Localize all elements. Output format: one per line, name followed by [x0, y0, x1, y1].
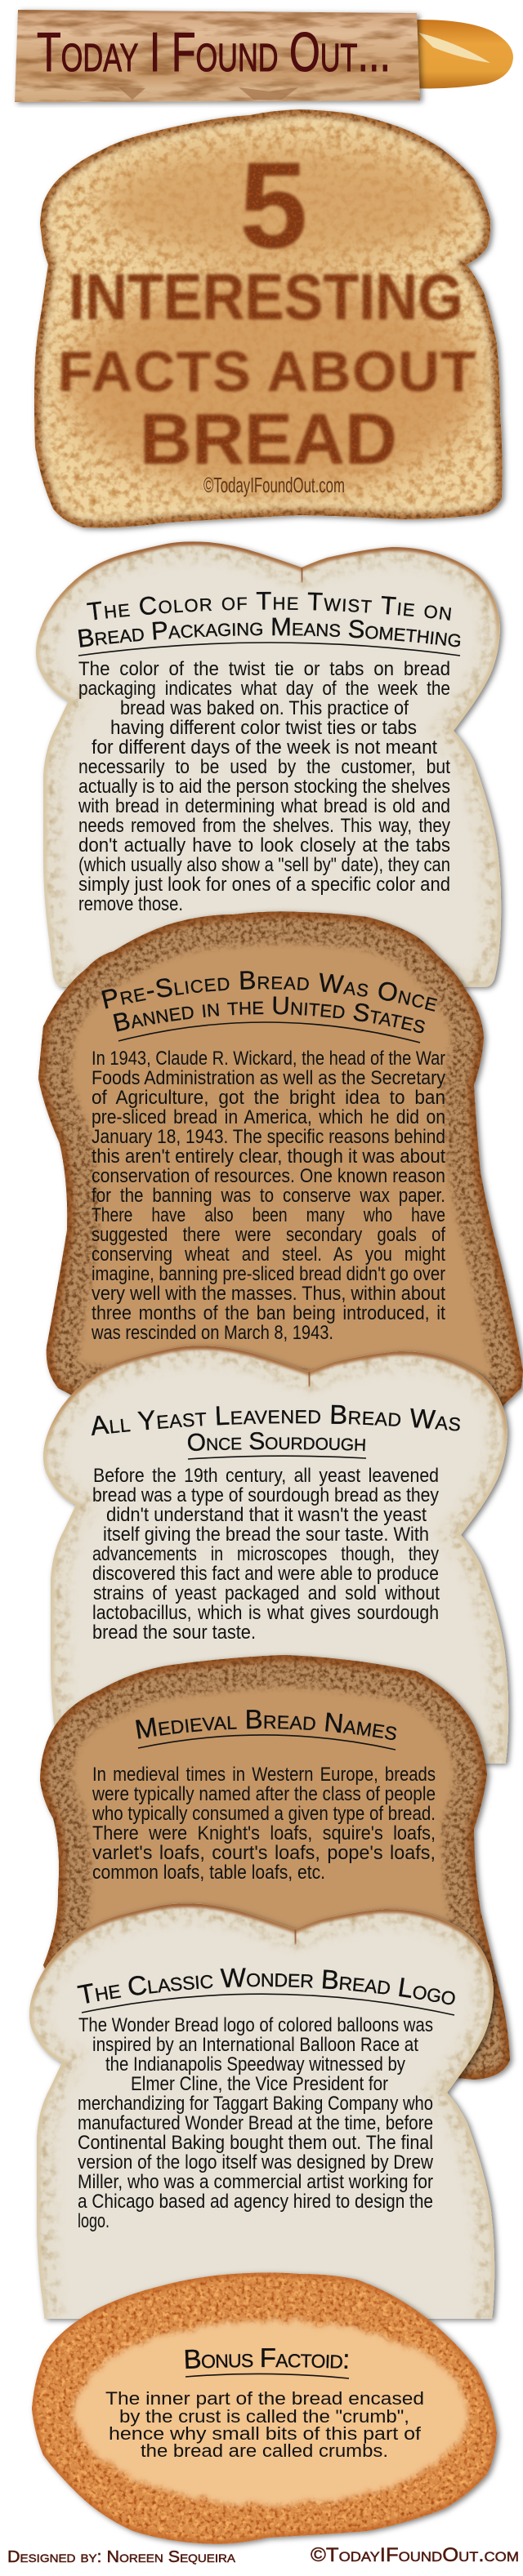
body text: was rescinded on March 8, 1943.: [91, 1322, 333, 1344]
panel: pre-sliced bread ban: Banned in the United States: [113, 996, 425, 1034]
body text: The inner part of the bread encased: [105, 2388, 424, 2409]
body text: packaging indicates what day of the week the: [78, 678, 450, 700]
toast bread: [34, 109, 503, 527]
body text: [92, 1465, 440, 1644]
body text: didn't understand that it wasn't the yeast: [106, 1504, 427, 1526]
body text: three months of the ban being introduced, it: [92, 1302, 445, 1324]
toast title text: [58, 136, 476, 479]
body text: [92, 1764, 436, 1884]
body text: The color of the twist tie or tabs on bread: [78, 658, 450, 680]
body text: actually is to aid the person stocking the shelves: [78, 776, 450, 798]
body text: inspired by an International Balloon Race at: [92, 2034, 418, 2056]
body text: conserving wheat and steel. As you might: [92, 1244, 445, 1266]
round bread slice: [32, 2273, 497, 2544]
panel: medieval bread names: [38, 1653, 516, 2085]
body text: lactobacillus, which is what gives sourdough: [92, 1602, 439, 1624]
body text: Elmer Cline, the Vice President for: [131, 2073, 388, 2095]
body text: logo.: [78, 2210, 110, 2232]
panel: pre-sliced bread ban: [38, 910, 523, 1412]
toast credit: ©TodayIFoundOut.com: [203, 473, 345, 497]
body text: [91, 1048, 445, 1344]
header title: Today I Found Out...: [37, 21, 391, 83]
body text: varlet's loafs, court's loafs, pope's loafs,: [92, 1842, 436, 1864]
body text: suggested there were secondary goals of: [92, 1224, 445, 1246]
heading: All Yeast Leavened Bread Was: [92, 1404, 461, 1435]
toast title text: INTERESTING: [69, 260, 463, 333]
panel: twist tie colour: [34, 539, 507, 993]
icon: baguette: [413, 20, 513, 88]
body text: pre-sliced bread in America, which he did on: [92, 1106, 445, 1128]
panel: yeast leavened bread: [42, 1344, 515, 1769]
body text: merchandizing for Taggart Baking Company who: [78, 2093, 433, 2115]
body text: [78, 658, 450, 915]
body text: with bread in determining what bread is old and: [78, 795, 450, 817]
body text: necessarily to be used by the customer, but: [78, 756, 450, 778]
body text: were typically named after the class of people: [92, 1783, 436, 1805]
panel: twist tie colour: Bread Packaging Means Something: [78, 617, 461, 647]
wheat bread slice: [38, 911, 523, 1408]
body text: for the banning was to conserve wax paper.: [92, 1185, 445, 1207]
body text: In medieval times in Western Europe, breads: [92, 1764, 436, 1786]
body text: conservation of resources. One known reason: [92, 1165, 445, 1187]
heading: Pre-Sliced Bread Was Once: [101, 971, 438, 1012]
header: paper bag with baguette: [15, 10, 513, 102]
body text: Continental Baking bought them out. The final: [78, 2132, 433, 2154]
body text: a Chicago based ad agency hired to design the: [78, 2191, 433, 2213]
body text: by the crust is called the "crumb",: [119, 2406, 409, 2427]
body text: bread the sour taste.: [92, 1622, 256, 1644]
body text: [78, 2014, 434, 2232]
body text: (which usually also show a "sell by" date), they can: [78, 854, 450, 876]
white bread slice: [36, 541, 501, 987]
body text: Foods Administration as well as the Secretary: [92, 1067, 445, 1089]
heading: The Classic Wonder Bread Logo: [77, 1968, 455, 2005]
body text: In 1943, Claude R. Wickard, the head of the War: [92, 1048, 445, 1070]
toast title text: BREAD: [140, 398, 397, 479]
body text: needs removed from the shelves. This way, they: [78, 815, 450, 837]
heading: Medieval Bread Names: [136, 1710, 397, 1740]
body text: this aren't entirely clear, though it was about: [92, 1146, 445, 1168]
white bread slice: [43, 1346, 508, 1791]
body text: [105, 2388, 424, 2461]
body text: simply just look for ones of a specific color and: [78, 874, 450, 896]
body text: remove those.: [78, 893, 183, 915]
body text: the Indianapolis Speedway witnessed by: [105, 2053, 405, 2075]
body text: advancements in microscopes though, they: [92, 1543, 439, 1565]
body text: There have also been many who have: [92, 1204, 445, 1226]
body text: itself giving the bread the sour taste. With: [103, 1524, 429, 1546]
panel: yeast leavened bread: Once Sourdough: [188, 1432, 365, 1452]
toast slice with burnt-in title: [34, 109, 503, 527]
body text: manufactured Wonder Bread at the time, before: [78, 2112, 433, 2134]
body text: January 18, 1943. The specific reasons behind: [92, 1126, 445, 1148]
heading: The Color of The Twist Tie on: [87, 591, 451, 621]
paper bag: [15, 10, 420, 102]
body text: who typically consumed a given type of bread.: [92, 1803, 436, 1825]
panel: wonder bread logo: [28, 1902, 502, 2325]
body text: having different color twist ties or tabs: [110, 717, 417, 739]
body text: imagine, banning pre-sliced bread didn't go over: [92, 1263, 445, 1285]
toast title text: FACTS ABOUT: [58, 340, 476, 403]
body text: for different days of the week is not meant: [92, 736, 437, 759]
body text: The Wonder Bread logo of colored balloons was: [78, 2014, 433, 2036]
body text: don't actually have to look closely at the tabs: [78, 834, 450, 856]
body text: bread was baked on. This practice of: [120, 697, 409, 719]
footer: site credit: ©TodayIFoundOut.com: [311, 2544, 519, 2566]
body text: very well with the masses. Thus, within about: [92, 1283, 445, 1305]
footer: designer credit: Designed by: Noreen Sequeira: [7, 2548, 236, 2566]
body text: discovered this fact and were able to produce: [92, 1563, 439, 1585]
body text: common loafs, table loafs, etc.: [92, 1862, 325, 1884]
body text: bread was a type of sourdough bread as they: [92, 1484, 439, 1506]
white bread slice: [29, 1903, 494, 2349]
panel: bonus factoid: [31, 2270, 503, 2549]
body text: Before the 19th century, all yeast leavened: [93, 1465, 439, 1487]
heading: Bonus Factoid:: [185, 2348, 348, 2369]
body text: the bread are called crumbs.: [141, 2440, 388, 2461]
body text: hence why small bits of this part of: [109, 2423, 422, 2444]
body text: Miller, who was a commercial artist working for: [78, 2171, 433, 2193]
toast title text: 5: [239, 136, 307, 274]
body text: There were Knight's loafs, squire's loafs,: [92, 1822, 436, 1844]
body text: version of the logo itself was designed by Drew: [78, 2151, 434, 2173]
wheat bread slice: [40, 1655, 510, 2080]
body text: of Agriculture, got the bright idea to ban: [92, 1087, 445, 1109]
body text: strains of yeast packaged and sold without: [93, 1582, 440, 1604]
